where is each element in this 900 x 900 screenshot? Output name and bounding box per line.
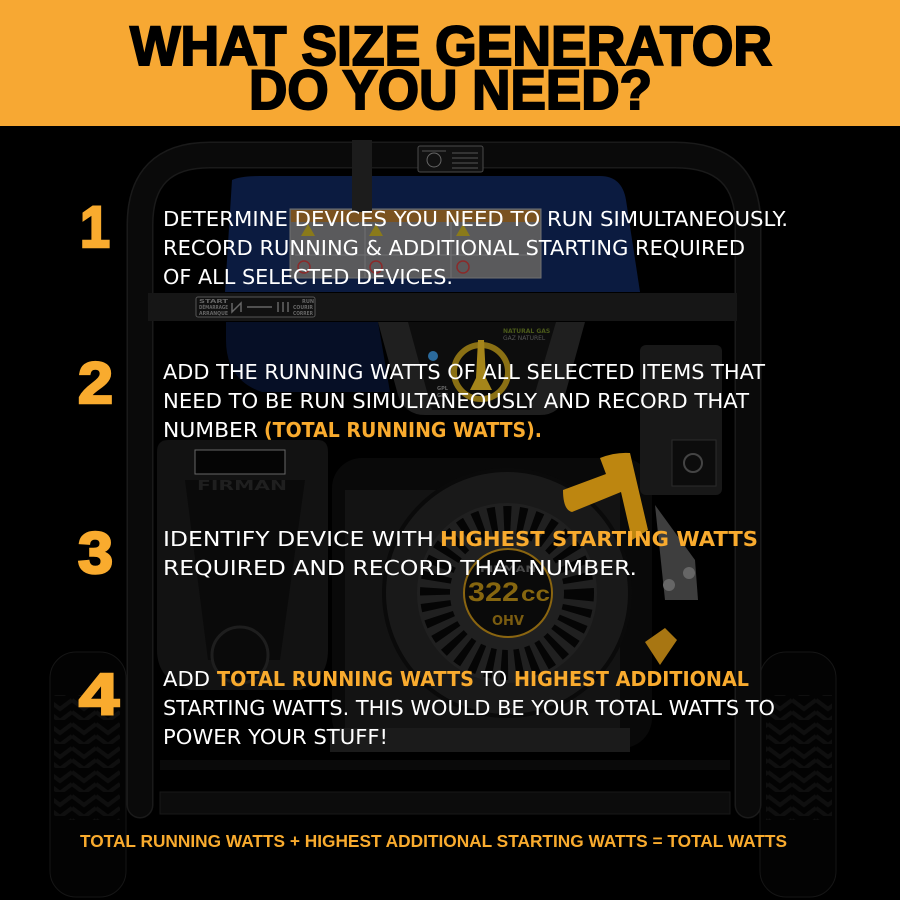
step 1 text: DETERMINE DEVICES YOU NEED TO RUN SIMULTANEOUSLY.	[163, 207, 788, 231]
number 4: 4	[79, 662, 119, 727]
engine badge: cc	[521, 583, 550, 606]
step 2 text: NUMBER	[163, 418, 258, 442]
step 2 text	[163, 360, 765, 442]
engine housing	[332, 458, 652, 748]
fuel selector panel: GAZ NATUREL	[503, 335, 546, 342]
step 1 text: RECORD RUNNING & ADDITIONAL STARTING REQUIRED	[163, 236, 745, 260]
start run label: ARRANQUE	[199, 311, 229, 317]
step 4 text: TOTAL RUNNING WATTS	[217, 667, 474, 691]
number 3: 3	[78, 521, 113, 586]
engine badge	[464, 549, 552, 637]
step 1	[80, 195, 788, 289]
number 2: 2	[78, 351, 113, 416]
start run label: START	[199, 299, 229, 305]
warning label	[290, 209, 541, 278]
generator background image	[50, 140, 836, 897]
air filter cover: FIRMAN	[197, 479, 287, 494]
engine badge: FIRMAN	[480, 565, 536, 575]
engine badge: 322	[468, 577, 519, 607]
step 3 text: REQUIRED AND RECORD THAT NUMBER.	[163, 556, 637, 580]
title	[130, 14, 772, 121]
step 3 text: IDENTIFY DEVICE WITH	[163, 527, 434, 551]
start run label: COURIR	[293, 305, 313, 311]
frame strap	[352, 140, 372, 212]
air filter cover	[157, 440, 328, 690]
number 1: 1	[80, 195, 110, 260]
cross bar	[148, 293, 737, 321]
step 2 text: ADD THE RUNNING WATTS OF ALL SELECTED ITEMS THAT	[163, 360, 765, 384]
step 3	[78, 521, 758, 586]
start run label	[196, 297, 315, 317]
lower blue tank section	[226, 322, 390, 392]
step 4 text: STARTING WATTS. THIS WOULD BE YOUR TOTAL WATTS TO	[163, 696, 775, 720]
title: WHAT SIZE GENERATOR	[130, 14, 772, 77]
engine badge: OHV	[492, 614, 524, 629]
step 4 text: TO	[480, 667, 507, 691]
step 2 text: NEED TO BE RUN SIMULTANEOUSLY AND RECORD THAT	[163, 389, 749, 413]
recoil starter	[384, 470, 630, 716]
fuel tank	[225, 176, 640, 292]
step 4 text: HIGHEST ADDITIONAL	[514, 667, 749, 691]
side engine panel	[345, 490, 620, 740]
right wheel	[760, 652, 836, 897]
tube frame	[140, 155, 748, 805]
left wheel	[50, 652, 126, 897]
step 3 text	[163, 527, 758, 580]
step 3 text: HIGHEST STARTING WATTS	[440, 527, 758, 551]
fuel selector panel: GPL	[437, 386, 449, 392]
base frame	[160, 728, 730, 814]
hose label	[418, 146, 483, 172]
title: DO YOU NEED?	[249, 58, 652, 121]
small yellow lever	[645, 628, 677, 665]
step 4 text: POWER YOUR STUFF!	[163, 725, 388, 749]
step 1 text: OF ALL SELECTED DEVICES.	[163, 265, 453, 289]
fuel selector panel: GLP	[437, 393, 448, 399]
start run label: CORRER	[293, 311, 313, 317]
step 1 text	[163, 207, 788, 289]
start run label: RUN	[302, 299, 314, 305]
fuel selector panel: NATURAL GAS	[503, 328, 550, 335]
carburetor assembly	[640, 345, 722, 600]
title banner	[0, 0, 900, 126]
step 4 text	[163, 667, 775, 749]
step 4 text: ADD	[163, 667, 210, 691]
start run label: DÉMARRAGE	[199, 303, 228, 311]
yellow starter handle	[563, 453, 648, 540]
step 2 text: (TOTAL RUNNING WATTS).	[264, 418, 542, 442]
step 4	[79, 662, 775, 749]
formula footer: TOTAL RUNNING WATTS + HIGHEST ADDITIONAL STARTING WATTS = TOTAL WATTS	[80, 831, 787, 851]
fuel selector panel	[378, 322, 585, 415]
step 2	[78, 351, 765, 442]
